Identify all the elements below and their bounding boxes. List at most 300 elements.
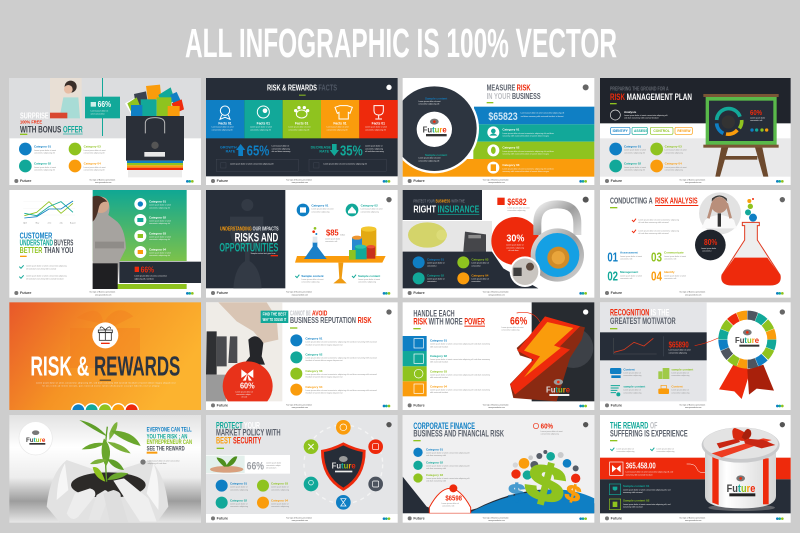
category list: Category 02 xyxy=(305,352,323,356)
checks: Lorem ipsum dolor sit xyxy=(656,447,674,450)
photo circle: stressed man xyxy=(699,192,741,234)
heading: measure risk: RISK xyxy=(517,83,531,93)
heading: surprise offer: OFFER xyxy=(63,124,83,134)
category rows: Lorem ipsum dolor sit amet consectetur adipiscing elit sed diam xyxy=(502,167,554,170)
heading: everyone can tell: YOU THE RISK ; AN xyxy=(147,433,188,440)
footer xyxy=(14,179,194,184)
footer: Your topic of Business presentation xyxy=(286,516,312,519)
categories: Category 04 xyxy=(271,498,288,502)
features: consectetur adipiscing xyxy=(623,374,641,377)
footer: Your topic of Business presentation xyxy=(679,516,705,519)
stat: growth rate 65%: Lorem ipsum dolor sit xyxy=(272,145,290,148)
stat: growth rate 65%: elit sed diam nonummy xyxy=(272,150,291,153)
samples: Sample content xyxy=(301,274,324,278)
balance scale with flask and cylinders: million xyxy=(340,235,345,237)
heading: risks and opportunities: Sample content text goes here xyxy=(251,252,275,255)
heading: conducting a risk analysis xyxy=(610,196,698,208)
green category list: Category 01 xyxy=(149,200,166,204)
panel: risks and opportunities slide xyxy=(206,190,398,298)
categories: Lorem ipsum dolor sit xyxy=(230,502,248,505)
categories: Category 02 xyxy=(426,460,443,464)
numbered list: Lorem ipsum dolor sit amet xyxy=(620,274,643,277)
checks: consectetur adipiscing xyxy=(656,450,674,453)
facts band: Lorem ipsum dolor sit amet xyxy=(212,126,234,129)
heading: risks and opportunities xyxy=(219,227,279,256)
categories: Lorem ipsum dolor sit amet consectetur adipiscing elit xyxy=(426,477,470,480)
circle: dark with logo: Lorem ipsum dolor sit amet xyxy=(418,157,441,160)
footer xyxy=(408,291,587,296)
panel: risk management plan slide xyxy=(600,78,791,185)
numbered list: Identify xyxy=(664,270,675,274)
footer xyxy=(211,516,390,522)
line chart: August xyxy=(70,221,76,224)
heading: conducting a risk analysis: RISK ANALYSIS xyxy=(655,196,698,206)
categories: sed diam nonummy nibh xyxy=(426,468,446,470)
features: Lorem ipsum dolor sit xyxy=(671,371,689,374)
footer: Future xyxy=(20,179,31,183)
wave background xyxy=(403,477,594,513)
heading: protect market policy: PROTECT xyxy=(216,420,243,430)
footer xyxy=(605,179,784,184)
categories dark: Lorem ipsum dolor sit xyxy=(427,277,445,280)
category text: nibh euismod tincidunt xyxy=(430,391,449,394)
callout: find the best way: FIND THE BEST xyxy=(263,312,287,317)
category 03: Category 03 xyxy=(84,145,101,149)
categories top: Category 01 xyxy=(311,203,329,207)
note boxes: Lorem ipsum dolor sit amet consectetur adipiscing elit xyxy=(230,162,274,165)
categories dark: consectetur xyxy=(471,264,481,267)
stat: growth rate 65%: GROWTH xyxy=(220,146,237,150)
dark chart band: $65890 xyxy=(669,340,689,349)
categories xyxy=(413,447,470,483)
numbered list: 04 xyxy=(651,268,663,283)
categories dark: Category 04 xyxy=(471,273,489,277)
heading: risk and rewards facts: FACTS xyxy=(318,83,337,93)
heading: the reward of suffering: OF xyxy=(650,421,657,431)
stat: 60%: Lorem ipsum dolor sit amet xyxy=(541,430,563,433)
line chart: June xyxy=(47,222,51,224)
heading: risk and rewards xyxy=(30,350,180,381)
panel: reward of suffering slide xyxy=(600,415,791,523)
checks xyxy=(610,447,674,453)
heading: customer understand buyers: CUSTOMER xyxy=(20,230,53,240)
footer: Future xyxy=(413,516,425,520)
photo: hands holding plant xyxy=(47,420,168,523)
footer: Future xyxy=(20,291,31,295)
checklist: elit sed diam nonummy nibh euismod xyxy=(638,221,669,224)
features: sample content xyxy=(623,385,645,389)
categories: Lorem ipsum dolor sit amet consectetur adipiscing elit xyxy=(426,464,470,467)
stat: $6598: Lorem ipsum dolor sit xyxy=(441,502,459,505)
ribbon badge xyxy=(719,316,774,399)
easel with chart: consectetur elit xyxy=(750,119,763,122)
dollar signs and bubbles: $ xyxy=(508,480,525,506)
categories dark: Category 03 xyxy=(471,258,489,262)
heading: risks and opportunities: RISKS AND xyxy=(235,231,279,245)
circle: dark with logo: Lorem ipsum dolor sit amet xyxy=(418,100,441,103)
red circle: 60% xyxy=(223,361,273,401)
panel: right insurance slide xyxy=(403,190,594,298)
category 04 xyxy=(69,160,106,172)
footer: www.yourwebsite.com xyxy=(95,181,112,184)
category list: Category 03 xyxy=(305,369,323,373)
numbered list: 03 xyxy=(651,249,662,264)
subtitle text: Lorem ipsum dolor sit amet, consectetur adipiscing elit, sed diam nonummy nibh euismod tincidunt ut laoreet dolore magna aliquam erat xyxy=(36,382,176,385)
categories: Lorem ipsum dolor sit xyxy=(271,486,289,489)
category rows: Category 03 xyxy=(502,163,520,167)
heading: risk and rewards: RISK & xyxy=(30,350,89,381)
category 01: consectetur adipiscing elit xyxy=(34,152,55,155)
analysis note: Analysis xyxy=(624,110,637,114)
panel: corporate finance slide xyxy=(403,415,594,523)
checklist: Lorem ipsum dolor sit amet consectetur adipiscing xyxy=(638,218,679,221)
category list: Category 04 xyxy=(305,385,323,389)
balance scale with flask and cylinders: consectetur elit xyxy=(325,240,338,243)
colored bands xyxy=(403,107,594,177)
green category list: consectetur adipiscing elit xyxy=(149,254,170,257)
dark stat bar: 66% xyxy=(119,262,201,283)
categories: Lorem ipsum dolor sit xyxy=(230,486,248,489)
stat: decrease rate 35%: elit sed diam nonummy xyxy=(365,150,384,153)
callout: 66%: amet consectetur xyxy=(91,112,105,115)
category list: tincidunt ut laoreet dolore magna aliquam erat xyxy=(305,343,343,346)
footer: Your topic of Business presentation xyxy=(286,403,312,406)
heading: right insurance xyxy=(403,190,482,220)
numbered list: consectetur elit xyxy=(620,277,633,280)
sample content rows: Lorem ipsum dolor sit amet consectetur adipiscing elit, sed xyxy=(623,488,670,491)
facts band: Lorem ipsum dolor sit amet xyxy=(288,126,311,129)
category list: tincidunt ut laoreet dolore magna aliquam erat xyxy=(305,392,343,395)
dark chart band: consectetur adipiscing xyxy=(669,351,687,354)
samples: consectetur adipiscing xyxy=(301,281,319,284)
green category list: Category 04 xyxy=(149,247,166,251)
dollar signs and bubbles: $ xyxy=(520,451,572,516)
facts band: consectetur adipiscing elit xyxy=(365,128,386,131)
footer: Your topic of Business presentation xyxy=(679,403,705,406)
heading: right insurance: BUSINESS xyxy=(436,199,450,204)
photo: piggy bank and calculator xyxy=(408,222,486,253)
stat row: 66% with plant: elit sed diam xyxy=(266,467,277,470)
numbered list: Communicate xyxy=(664,251,684,255)
categories top: Category 02 xyxy=(361,203,378,207)
color dots xyxy=(71,403,139,410)
dark stat bar: 66%: Lorem ipsum dolor sit amet, consectetur xyxy=(134,274,167,277)
red circle: 30%: 30% xyxy=(506,234,524,245)
category list: Category 01 xyxy=(305,337,323,341)
heading: business reputation risk: CANNOT BE xyxy=(290,309,311,318)
heading: measure risk: IN YOUR xyxy=(487,91,511,101)
stat row: 66% with plant: 66% xyxy=(247,460,264,472)
heading: customer understand buyers xyxy=(20,230,73,257)
category text: Lorem ipsum dolor sit amet consectetur adipiscing elit sed diam nonummy xyxy=(430,343,490,346)
samples xyxy=(295,274,381,284)
footer: Future xyxy=(413,179,425,183)
stat: growth rate 65%: 65% xyxy=(247,144,269,160)
sample content rows: Lorem ipsum dolor sit amet consectetur adipiscing elit, sed xyxy=(623,503,670,506)
categories: consectetur adipiscing xyxy=(230,505,248,508)
categories top: Lorem ipsum dolor sit amet xyxy=(311,208,334,211)
note boxes: Lorem ipsum dolor sit amet consectetur adipiscing elit xyxy=(323,162,367,165)
footer xyxy=(408,403,587,409)
stat: $6582: consectetur adipiscing xyxy=(507,209,525,212)
footer: www.yourwebsite.com xyxy=(488,406,505,409)
photo: hand and chess xyxy=(206,302,282,401)
footer: Future xyxy=(217,516,228,520)
sample content rows xyxy=(609,484,670,510)
category text: Lorem ipsum dolor sit amet consectetur adipiscing elit sed diam nonummy xyxy=(430,358,490,361)
category 01 xyxy=(19,143,57,155)
stat: $65823 xyxy=(488,111,565,123)
categories: Lorem ipsum dolor sit amet xyxy=(665,166,687,169)
heading: the reward of suffering: THE REWARD xyxy=(610,421,648,431)
facts band: Facts 01 xyxy=(372,121,385,125)
footer: Future xyxy=(217,291,228,295)
numbered list: consectetur elit xyxy=(620,258,633,261)
numbered list: Lorem ipsum dolor sit amet xyxy=(620,255,643,258)
heading: measure risk: BUSINESS xyxy=(512,91,541,101)
category list: Lorem ipsum dolor sit amet consectetur adipiscing elit sed diam nonummy nibh euismod xyxy=(305,341,377,344)
subtitle text xyxy=(36,382,176,387)
heading: conducting a risk analysis: CONDUCTING A xyxy=(610,196,653,206)
heading: greatest motivator: RECOGNITION xyxy=(610,308,649,318)
tag buttons xyxy=(611,127,692,134)
categories: Category 03 xyxy=(426,473,443,477)
categories dark: Category 01 xyxy=(427,258,444,262)
categories dark: consectetur xyxy=(427,264,437,267)
heading: risk management plan: PREPARING THE GROUND FOR A xyxy=(610,87,669,93)
stat: 66%: consectetur adipiscing xyxy=(501,329,519,332)
heading: risk management plan: RISK xyxy=(610,92,625,102)
dark circle: 80%: consectetur xyxy=(702,250,712,253)
categories xyxy=(216,480,289,509)
green category list: Lorem ipsum dolor sit amet xyxy=(149,251,172,254)
heading: protect market policy: SECURITY xyxy=(233,435,262,445)
panel: risk and rewards cover slide xyxy=(9,302,201,417)
category text xyxy=(430,339,490,394)
category text: Category 02 xyxy=(430,354,447,358)
stat: 365.458.00 xyxy=(610,462,705,476)
features: consectetur adipiscing xyxy=(623,391,641,394)
features: Lorem ipsum dolor sit xyxy=(671,389,689,392)
heading: handle each risk: RISK xyxy=(413,316,427,326)
heading: risk management plan xyxy=(610,87,692,104)
categories dark: Lorem ipsum dolor sit xyxy=(471,277,489,280)
categories top: consectetur adipiscing xyxy=(311,210,329,213)
category 04: Category 04 xyxy=(84,162,101,166)
categories dark: consectetur xyxy=(471,280,481,283)
stat: $6582: $6582 xyxy=(507,197,527,207)
heading: protect market policy: BEST xyxy=(216,435,232,445)
numbered list: consectetur elit xyxy=(664,277,677,280)
subtitle text: Ut wisi enim ad minim veniam, quis nostrud exerci tation ullamcorper suscipit lobortis nisl ut aliquip xyxy=(43,384,159,387)
red circle: 60%: Lorem ipsum dolor sit xyxy=(235,390,253,393)
footer: www.yourwebsite.com xyxy=(292,406,309,409)
dark stat bar: 66%: adipiscing elit, sed diam xyxy=(134,277,154,280)
footer xyxy=(605,291,784,296)
facts band: consectetur adipiscing elit xyxy=(212,128,233,131)
category list xyxy=(290,334,377,396)
categories: sed diam nonummy nibh xyxy=(426,481,446,483)
line chart xyxy=(23,201,76,224)
categories: consectetur adipiscing xyxy=(665,169,683,172)
numbered list xyxy=(607,249,687,283)
heading: business reputation risk xyxy=(290,309,372,329)
stat: decrease rate 35% xyxy=(311,144,384,160)
heading: corporate finance xyxy=(413,421,504,441)
footer: Your topic of Business presentation xyxy=(679,179,705,182)
categories: consectetur adipiscing xyxy=(271,505,289,508)
categories: Category 01 xyxy=(426,447,443,451)
features: consectetur adipiscing xyxy=(671,391,689,394)
panel: plant in hands slide xyxy=(9,415,201,523)
category 04: consectetur adipiscing elit xyxy=(84,169,105,172)
note boxes xyxy=(216,159,386,171)
callout: 66% xyxy=(85,97,120,118)
features: sample content xyxy=(671,367,693,371)
stat: 66%: Lorem ipsum dolor sit amet xyxy=(501,326,524,329)
category 02 xyxy=(19,160,57,172)
padlock xyxy=(531,204,584,282)
red circle: 30%: elit sed diam xyxy=(508,249,519,252)
categories dark: consectetur xyxy=(427,280,437,283)
callout: 66%: 66% xyxy=(98,100,111,109)
heading: everyone can tell: ENTREPRENEUR CAN xyxy=(147,439,192,446)
categories top: Lorem ipsum dolor sit amet xyxy=(361,208,383,211)
heading: risks and opportunities: OPPORTUNITIES xyxy=(219,241,278,255)
heading: right insurance: WITH THE xyxy=(451,199,465,204)
dollar signs and bubbles xyxy=(508,450,584,516)
green category list: Category 02 xyxy=(149,215,166,219)
green category list: Lorem ipsum dolor sit amet xyxy=(149,219,172,222)
category text: Category 03 xyxy=(430,369,447,373)
footer xyxy=(605,516,784,522)
heading: risk and rewards facts: RISK & REWARDS xyxy=(267,83,317,93)
red circle: 30% xyxy=(491,217,539,265)
side icon blocks xyxy=(403,336,427,396)
heading: handle each risk: HANDLE EACH xyxy=(413,308,455,318)
stat: 60% xyxy=(533,422,563,436)
circle: dark with logo: consectetur adipiscing elit xyxy=(418,159,440,162)
heading: protect market policy: MARKET POLICY WITH xyxy=(216,427,281,437)
panel: measure risk slide xyxy=(390,78,594,185)
category rows: Lorem ipsum dolor sit amet consectetur adipiscing elit sed diam xyxy=(502,150,554,153)
circle: dark with logo xyxy=(402,86,479,174)
heading: right insurance: INSURANCE xyxy=(438,205,479,216)
footer: Your topic of Business presentation xyxy=(89,291,115,294)
stat: decrease rate 35%: consectetur adipiscing xyxy=(365,147,383,150)
footer: Future xyxy=(611,291,622,295)
dark circle: 80%: Lorem ipsum dolor xyxy=(701,248,717,250)
stat: 365.458.00: 365.458.00 xyxy=(626,462,656,471)
heading: handle each risk xyxy=(413,308,485,329)
heading: right insurance: PROTECT YOUR xyxy=(413,199,435,204)
category list: tincidunt ut laoreet dolore magna aliquam erat xyxy=(305,359,343,362)
facts band xyxy=(206,100,398,138)
panel: market policy security slide xyxy=(206,415,398,523)
facts band: Lorem ipsum dolor sit amet xyxy=(250,126,273,129)
red circle: 30%: consectetur adipiscing xyxy=(506,246,524,249)
easel with chart xyxy=(703,94,779,177)
sample content rows: nonummy nibh euismod xyxy=(623,507,642,509)
footer: Your topic of Business presentation xyxy=(483,291,509,294)
footer: Your topic of Business presentation xyxy=(286,291,312,294)
category rows: nonummy nibh euismod tincidunt ut laoreet dolore magna xyxy=(502,135,550,138)
checklist: Lorem ipsum dolor sit amet consectetur adipiscing xyxy=(638,229,679,232)
samples: Lorem ipsum dolor sit amet xyxy=(358,278,381,281)
callout: 66%: Lorem ipsum dolor sit xyxy=(91,109,109,112)
line chart: April xyxy=(23,221,28,224)
category rows: nonummy nibh euismod tincidunt ut laoreet dolore magna xyxy=(502,153,550,156)
callout: find the best way xyxy=(261,311,288,323)
panel: business reputation risk slide xyxy=(206,302,398,410)
panel: greatest motivator slide xyxy=(600,302,791,410)
facts band: Lorem ipsum dolor sit amet xyxy=(365,126,388,129)
stat: $6582: Lorem ipsum dolor sit amet xyxy=(507,206,530,209)
note xyxy=(140,459,180,465)
footer: www.yourwebsite.com xyxy=(685,406,702,409)
logo badge: Future xyxy=(26,437,46,444)
stat: 60%: consectetur adipiscing xyxy=(541,433,559,436)
footer: Your topic of Business presentation xyxy=(286,179,312,182)
footer: www.yourwebsite.com xyxy=(292,181,309,184)
bubbles xyxy=(745,198,757,222)
heading: customer understand buyers: THAN YOU xyxy=(44,245,73,255)
category list: Lorem ipsum dolor sit amet consectetur adipiscing elit sed diam nonummy nibh euismod xyxy=(305,356,377,359)
heading: protect market policy xyxy=(216,420,281,449)
ribbon badge: Future xyxy=(735,335,759,345)
category 03: Lorem ipsum dolor sit amet xyxy=(84,149,106,152)
panel: risk analysis slide xyxy=(600,190,791,298)
category rows: nonummy nibh euismod tincidunt ut laoreet dolore magna xyxy=(502,170,550,173)
green category list: Lorem ipsum dolor sit amet xyxy=(149,204,172,207)
footer xyxy=(211,403,390,409)
features xyxy=(610,367,693,396)
categories xyxy=(609,143,687,172)
flask xyxy=(722,222,780,285)
panel: customer understand buyers slide xyxy=(9,190,201,298)
numbered list: Management xyxy=(620,270,638,274)
categories: sed diam nonummy nibh xyxy=(426,455,446,457)
tag buttons: IDENTIFY xyxy=(613,129,629,133)
heading: business reputation risk: BUSINESS REPUTATION xyxy=(290,315,356,325)
dark stat bar: 66%: 66% xyxy=(141,265,154,274)
stat: 365.458.00: Lorem ipsum dolor sit amet consectetur adipiscing elit, sed xyxy=(626,470,673,473)
category 03: consectetur adipiscing elit xyxy=(84,152,105,155)
logo on dark: Future xyxy=(546,386,571,395)
note: adipiscing elit sed diam xyxy=(148,462,167,465)
category 01: Lorem ipsum dolor sit amet xyxy=(34,149,57,152)
footer: Future xyxy=(611,403,622,407)
green category list: consectetur adipiscing elit xyxy=(149,222,170,225)
categories: Lorem ipsum dolor sit amet xyxy=(624,166,647,169)
panel: risk and rewards facts slide xyxy=(206,78,398,185)
checklist: Lorem ipsum dolor sit amet consectetur adipiscing xyxy=(26,265,67,268)
heading: risk management plan: MANAGEMENT PLAN xyxy=(627,92,692,102)
checks: Lorem ipsum dolor sit xyxy=(616,447,634,450)
heading: everyone can tell: SEE THE REWARD xyxy=(147,445,185,452)
categories: Category 03 xyxy=(271,482,288,486)
features: Lorem ipsum dolor sit xyxy=(623,389,641,392)
tag buttons: ASSESS xyxy=(634,129,648,133)
checks: consectetur adipiscing xyxy=(616,450,634,453)
dark chart band xyxy=(600,332,726,360)
stat: 66% xyxy=(501,312,540,332)
heading: greatest motivator xyxy=(610,308,676,329)
easel with chart: 60% xyxy=(750,108,762,117)
categories: Category 02 xyxy=(624,162,641,166)
balance scale with flask and cylinders xyxy=(295,226,386,283)
footer xyxy=(14,291,194,296)
